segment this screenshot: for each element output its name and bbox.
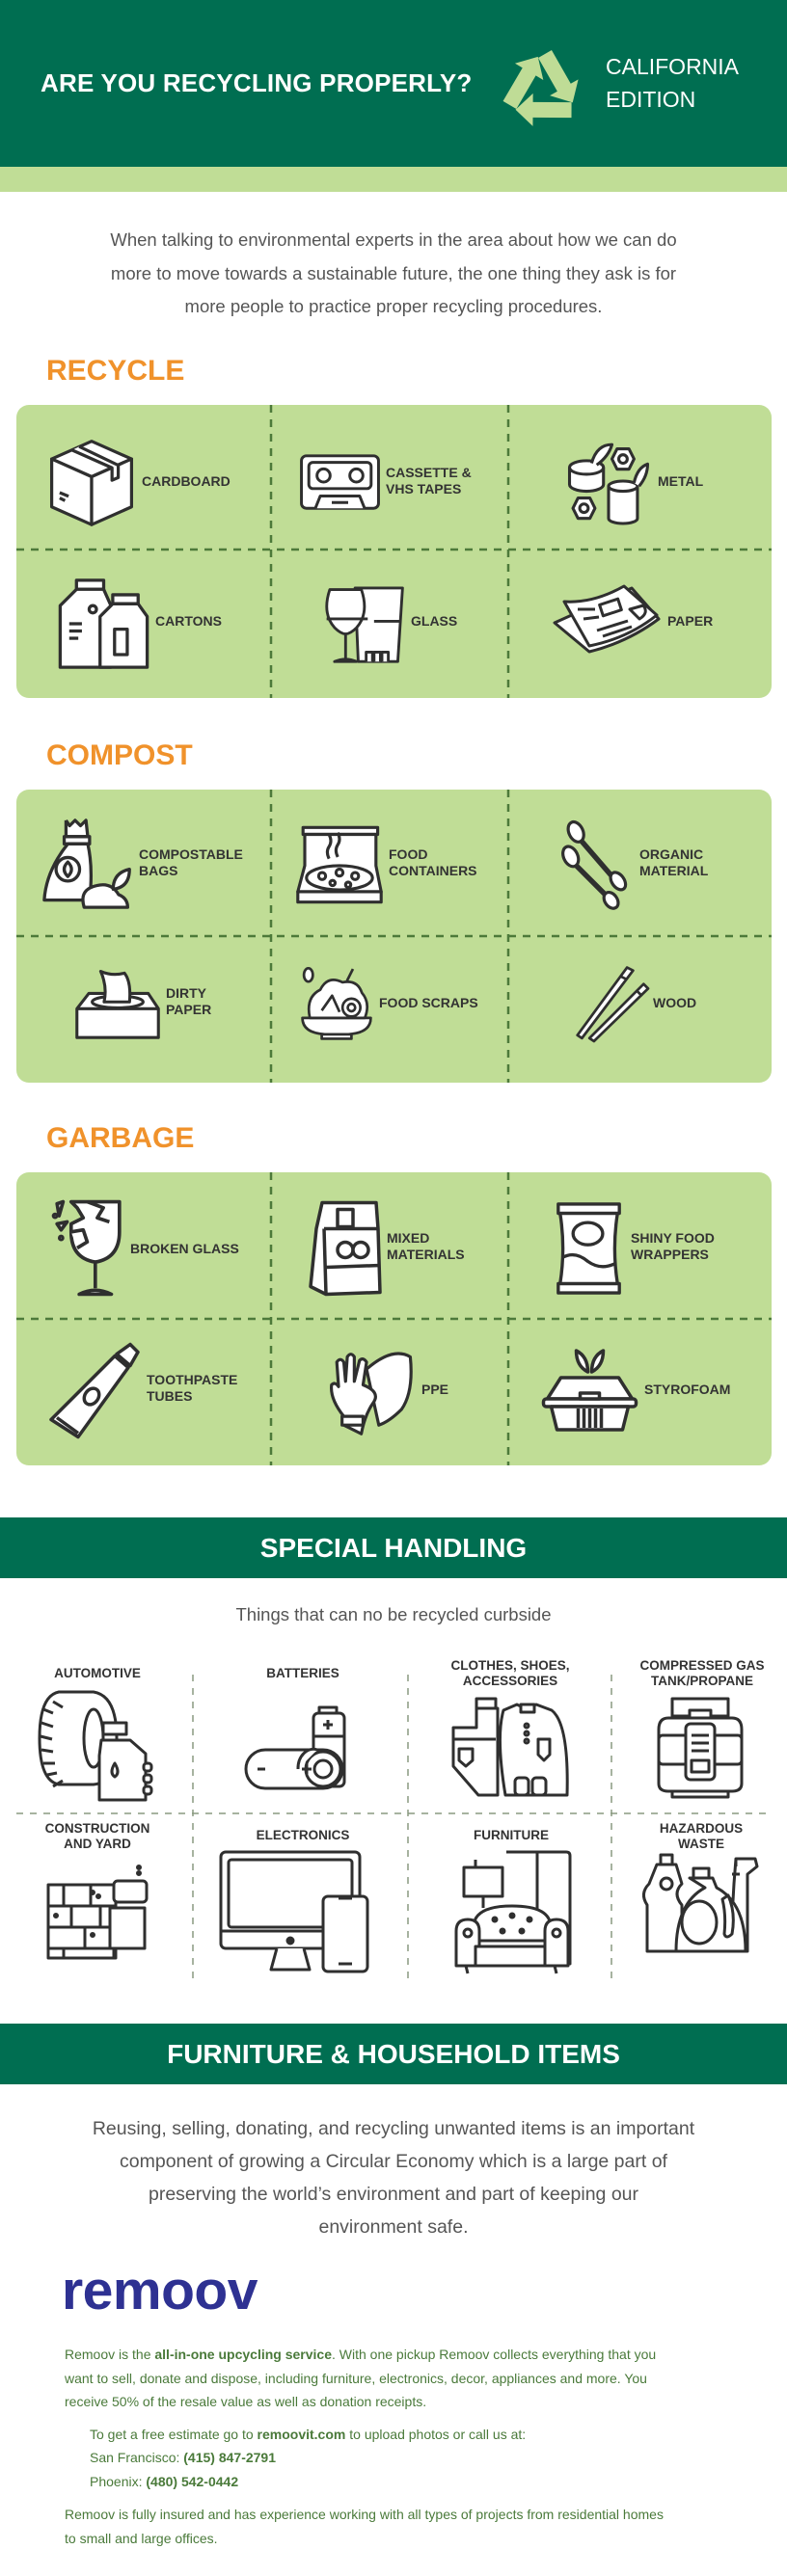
text block: remoov info: want to sell, donate and dispose, including furniture, electronics, decor, appliances and more. You xyxy=(65,2370,647,2385)
label: toothpaste tubes: TUBES xyxy=(147,1388,192,1404)
text block: remoov info: to small and large offices. xyxy=(65,2530,218,2545)
label: electronics: ELECTRONICS xyxy=(257,1828,349,1842)
text block: circular economy: preserving the world’s environment and part of keeping our xyxy=(149,2184,638,2205)
banner: furniture & household items: FURNITURE & HOUSEHOLD ITEMS xyxy=(167,2039,620,2069)
label: toothpaste tubes xyxy=(147,1372,237,1404)
icon: food scraps xyxy=(301,967,372,1040)
text block: circular economy xyxy=(0,2112,787,2243)
banner: special handling: SPECIAL HANDLING xyxy=(260,1533,527,1563)
icon: shiny food wrappers xyxy=(556,1202,621,1295)
text block: circular economy: component of growing a Circular Economy which is a large part of xyxy=(120,2151,667,2172)
icon: metal xyxy=(568,443,649,524)
label: PPE: PPE xyxy=(421,1382,448,1397)
light green stripe xyxy=(0,167,787,192)
label: food containers: CONTAINERS xyxy=(389,863,477,878)
logo: remoov: remoov xyxy=(62,2260,258,2321)
label: compressed gas: TANK/PROPANE xyxy=(651,1674,753,1688)
label: compressed gas xyxy=(639,1658,765,1688)
label: dirty paper: DIRTY xyxy=(166,985,206,1001)
label: shiny food wrappers: SHINY FOOD xyxy=(631,1230,715,1246)
label: construction: AND YARD xyxy=(64,1837,131,1851)
intro text: more people to practice proper recycling procedures. xyxy=(185,296,602,316)
text block: remoov info: Phoenix: (480) 542-0442 xyxy=(90,2474,238,2489)
label: furniture: FURNITURE xyxy=(474,1828,549,1842)
icon: bricks xyxy=(46,1865,149,1959)
icon: furniture xyxy=(455,1851,571,1974)
label: food containers: FOOD xyxy=(389,846,427,862)
banner: furniture & household items xyxy=(0,2024,787,2084)
icon: glass xyxy=(325,586,404,663)
icon: clothes xyxy=(451,1697,569,1797)
icon: broken glass xyxy=(52,1199,122,1296)
label: organic material: MATERIAL xyxy=(639,863,708,878)
label: cassette: CASSETTE & xyxy=(386,465,472,480)
banner: special handling xyxy=(0,1517,787,1578)
label: broken glass: BROKEN GLASS xyxy=(130,1241,239,1256)
icon: recycle symbol xyxy=(503,50,579,126)
label: automotive: AUTOMOTIVE xyxy=(54,1666,141,1680)
label: compostable bags xyxy=(139,846,243,878)
text block: remoov info: Remoov is the all-in-one upcycling service. With one pickup Remoov collects everything that you xyxy=(65,2347,656,2362)
header banner xyxy=(0,0,787,167)
panel: garbage xyxy=(16,1172,772,1465)
text block: remoov info: San Francisco: (415) 847-2791 xyxy=(90,2450,276,2465)
icon: batteries xyxy=(245,1706,345,1789)
label: hazardous: WASTE xyxy=(678,1837,724,1851)
label: cartons: CARTONS xyxy=(155,613,222,629)
heading: compost: COMPOST xyxy=(46,739,193,771)
label: shiny food wrappers xyxy=(631,1230,715,1262)
special handling grid xyxy=(16,1658,766,1978)
label: wood: WOOD xyxy=(653,995,696,1010)
label: glass: GLASS xyxy=(411,613,457,629)
icon: paper xyxy=(553,584,661,654)
label: clothes xyxy=(450,1658,570,1688)
label: shiny food wrappers: WRAPPERS xyxy=(631,1247,709,1262)
label: clothes: ACCESSORIES xyxy=(463,1674,557,1688)
label: compostable bags: BAGS xyxy=(139,863,177,878)
icon: tissue box xyxy=(75,970,160,1039)
icon: cassette xyxy=(300,454,380,510)
label: metal: METAL xyxy=(658,473,703,489)
label: compressed gas: COMPRESSED GAS xyxy=(639,1658,765,1673)
panel: compost xyxy=(16,790,772,1083)
text block: remoov info: To get a free estimate go to remoovit.com to upload photos or call us at: xyxy=(90,2426,526,2441)
icon: compostable bag xyxy=(42,818,131,909)
icon: cartons xyxy=(58,578,149,669)
label: dirty paper xyxy=(166,985,211,1017)
label: food scraps: FOOD SCRAPS xyxy=(379,995,478,1010)
heading: garbage: GARBAGE xyxy=(46,1122,194,1154)
label: cassette: VHS TAPES xyxy=(386,481,461,496)
label: paper: PAPER xyxy=(667,613,713,629)
icon: PPE xyxy=(330,1352,413,1436)
icon: mixed materials xyxy=(309,1201,382,1296)
icon: gas tank xyxy=(658,1697,743,1799)
icon: cardboard xyxy=(50,440,133,526)
label: mixed materials: MATERIALS xyxy=(387,1247,465,1262)
label: hazardous xyxy=(660,1821,743,1852)
text block: remoov info: Remoov is fully insured and has experience working with all types of projects from residential homes xyxy=(65,2507,664,2522)
icon: wood chopsticks xyxy=(576,966,650,1043)
intro text xyxy=(110,229,677,316)
label: cassette xyxy=(386,465,472,496)
intro text: more to move towards a sustainable future, the one thing they ask is for xyxy=(111,262,676,283)
label: clothes: CLOTHES, SHOES, xyxy=(450,1658,570,1673)
title: ARE YOU RECYCLING PROPERLY? xyxy=(41,68,472,97)
intro text: When talking to environmental experts in the area about how we can do xyxy=(110,229,677,250)
label: organic material xyxy=(639,846,708,878)
text block: circular economy: Reusing, selling, donating, and recycling unwanted items is an important xyxy=(93,2118,694,2139)
icon: tire and oil xyxy=(39,1691,152,1801)
icon: electronics xyxy=(220,1851,368,1972)
icon: organic material (spoons) xyxy=(561,819,627,910)
label: batteries: BATTERIES xyxy=(266,1666,339,1680)
label: hazardous: HAZARDOUS xyxy=(660,1821,743,1836)
subtitle: california edition: EDITION xyxy=(606,87,695,112)
heading: recycle: RECYCLE xyxy=(46,355,184,387)
subtitle: california edition xyxy=(606,54,739,112)
label: dirty paper: PAPER xyxy=(166,1002,211,1017)
icon: food containers xyxy=(296,825,383,904)
label: toothpaste tubes: TOOTHPASTE xyxy=(147,1372,237,1387)
text block: circular economy: environment safe. xyxy=(318,2216,469,2238)
label: organic material: ORGANIC xyxy=(639,846,703,862)
label: mixed materials: MIXED xyxy=(387,1230,429,1246)
label: compostable bags: COMPOSTABLE xyxy=(139,846,243,862)
label: food containers xyxy=(389,846,477,878)
subtitle: special handling: Things that can no be recycled curbside xyxy=(235,1604,552,1624)
icon: hazardous waste bottles xyxy=(643,1853,760,1955)
text block: remoov info: receive 50% of the resale value as well as donation receipts. xyxy=(65,2394,426,2409)
label: mixed materials xyxy=(387,1230,465,1262)
label: styrofoam: STYROFOAM xyxy=(644,1382,730,1397)
label: construction: CONSTRUCTION xyxy=(45,1821,149,1836)
icon: styrofoam xyxy=(542,1349,638,1432)
text block: remoov info xyxy=(65,2343,759,2550)
icon: toothpaste tube xyxy=(49,1342,140,1438)
label: construction xyxy=(45,1821,149,1851)
label: cardboard: CARDBOARD xyxy=(142,473,231,489)
panel: recycle xyxy=(16,405,772,698)
subtitle: california edition: CALIFORNIA xyxy=(606,54,739,79)
